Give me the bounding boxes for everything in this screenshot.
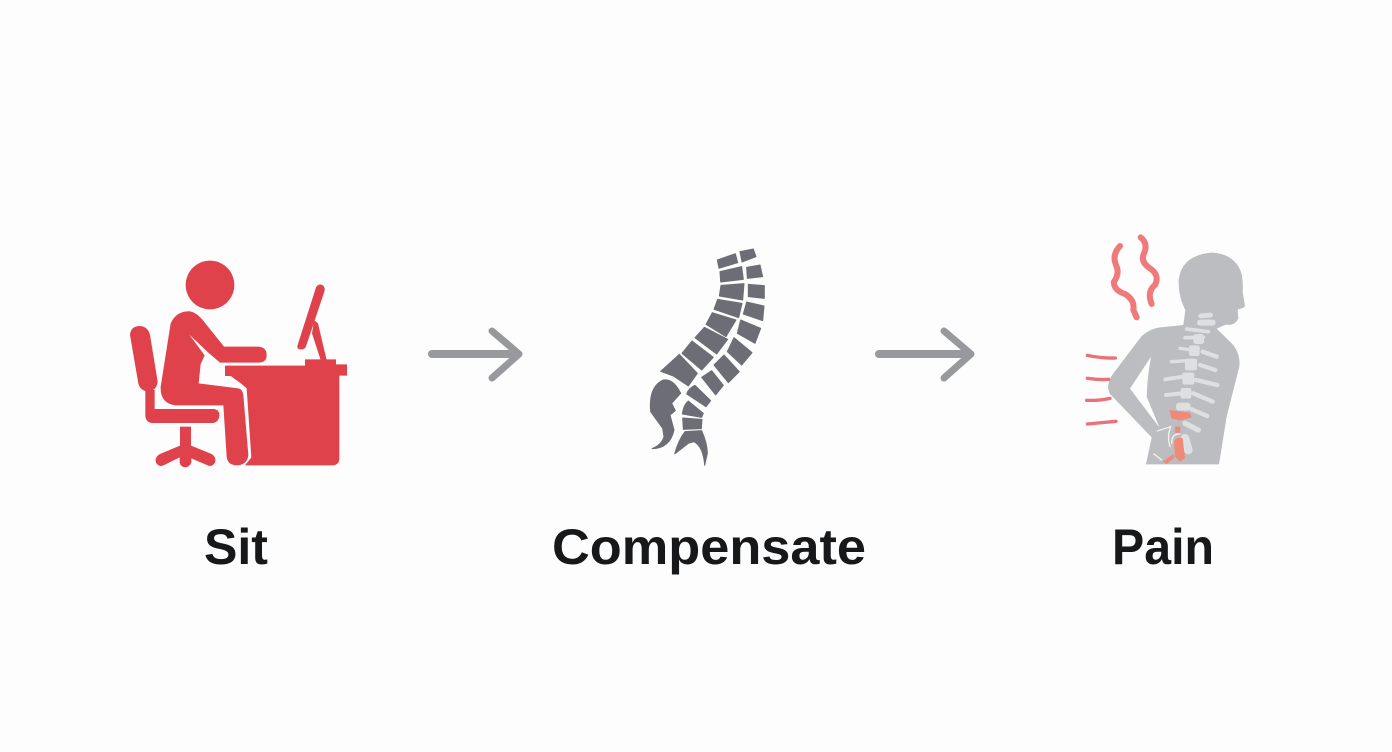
- vertebra row, left column: [717, 254, 738, 268]
- vertebra row, right column: [740, 249, 756, 262]
- chair stem and seat: [145, 390, 219, 423]
- chair back: [130, 326, 158, 392]
- spine bones: [1165, 315, 1217, 450]
- icon: person sitting at desk: [130, 261, 347, 467]
- label: Compensate: Compensate: [552, 519, 866, 575]
- pelvis: [650, 380, 681, 449]
- desk: [225, 359, 347, 465]
- sacrum: [675, 431, 707, 465]
- hand on back: [1152, 427, 1172, 460]
- arrow 1: [432, 331, 519, 378]
- body silhouette: [1108, 253, 1245, 464]
- body and arm: [161, 311, 267, 465]
- label: Sit: Sit: [204, 519, 268, 575]
- monitor stand: [312, 320, 327, 360]
- pain lines beside the back: [1087, 355, 1116, 424]
- label: Pain: Pain: [1112, 519, 1214, 575]
- icon: curved spine: [650, 249, 764, 465]
- pain highlights on lower spine: [1163, 410, 1192, 464]
- chair base: [156, 427, 215, 467]
- monitor screen: [297, 285, 325, 349]
- head: [186, 261, 234, 309]
- vertebral bodies: [1176, 334, 1204, 411]
- radiating pain waves: [1114, 237, 1157, 317]
- hand highlights: [1154, 427, 1180, 460]
- icon: person with back pain: [1087, 237, 1245, 464]
- arrow 2: [879, 331, 971, 378]
